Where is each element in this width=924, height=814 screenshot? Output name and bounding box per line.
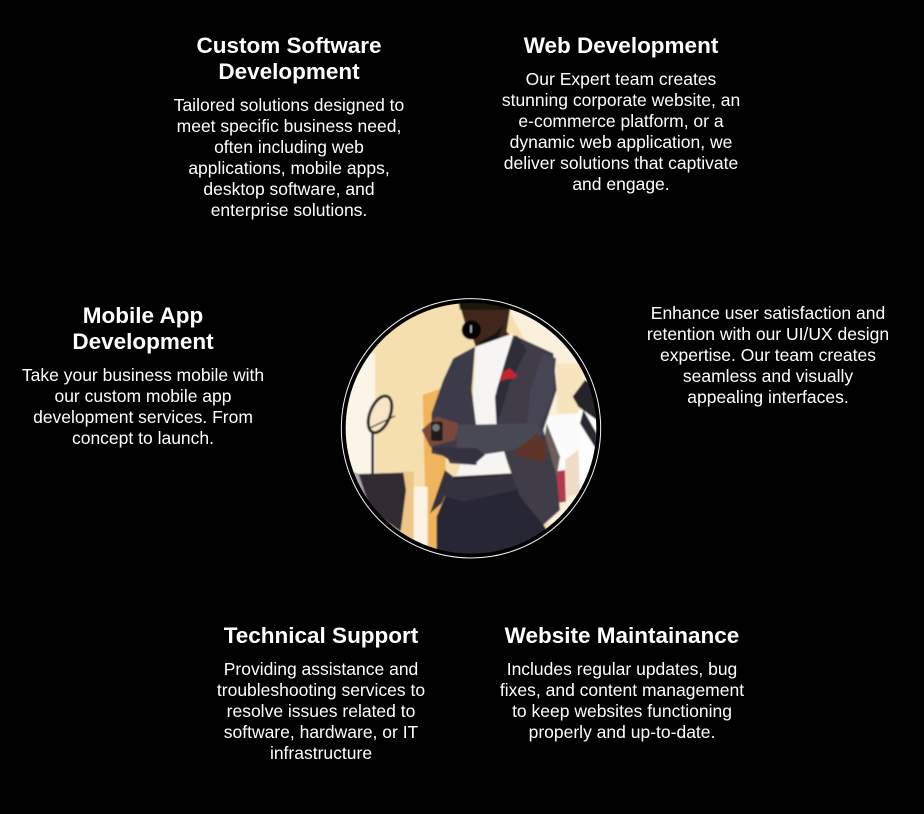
- right objects: [573, 380, 597, 420]
- service: ui/ux design: [647, 303, 889, 407]
- wall: [370, 304, 554, 540]
- service: technical support: [217, 623, 425, 763]
- portrait scene: [346, 303, 596, 554]
- description: mobile app development: [22, 365, 264, 448]
- description: website maintainance: fixes, and content management: [500, 680, 744, 700]
- description: technical support: resolve issues related to: [227, 701, 415, 721]
- description: website maintainance: Includes regular updates, bug: [507, 659, 737, 679]
- description: ui/ux design: seamless and visually: [683, 366, 853, 386]
- description: custom software development: enterprise solutions.: [211, 200, 367, 220]
- description: web development: e-commerce platform, or a: [518, 111, 724, 131]
- service: web development: [502, 33, 740, 194]
- door: [422, 388, 446, 549]
- description: technical support: software, hardware, or IT: [224, 722, 418, 742]
- description: custom software development: meet specific business need,: [177, 116, 401, 136]
- description: custom software development: often including web: [214, 137, 364, 157]
- service: website maintainance: [500, 623, 744, 742]
- heading: mobile app development: Mobile App: [83, 303, 203, 328]
- neck and head: [460, 308, 511, 348]
- description: mobile app development: concept to launch.: [72, 428, 214, 448]
- ring light: [366, 394, 394, 436]
- description: web development: and engage.: [572, 174, 670, 194]
- white outer ring: [341, 299, 601, 558]
- description: technical support: troubleshooting services to: [217, 680, 425, 700]
- description: mobile app development: development services. From: [33, 407, 253, 427]
- description: website maintainance: properly and up-to-date.: [529, 722, 715, 742]
- trousers: [437, 473, 547, 557]
- wristwatch: [431, 422, 443, 441]
- heading: mobile app development: Development: [72, 329, 214, 354]
- description: web development: Our Expert team creates: [526, 69, 716, 89]
- heading: mobile app development: [72, 303, 214, 354]
- chair: [358, 473, 406, 532]
- white shirt: [457, 333, 513, 476]
- heading: custom software development: Development: [218, 59, 360, 84]
- description: ui/ux design: [647, 303, 889, 407]
- description: technical support: infrastructure: [270, 743, 372, 763]
- hands: [422, 417, 458, 447]
- description: ui/ux design: appealing interfaces.: [687, 387, 849, 407]
- circular portrait photo: [340, 298, 602, 558]
- description: ui/ux design: expertise. Our team creates: [660, 345, 876, 365]
- heading: custom software development: Custom Software: [196, 33, 382, 58]
- heading: web development: Web Development: [524, 33, 718, 58]
- pocket square: [500, 368, 517, 382]
- description: technical support: Providing assistance and: [224, 659, 418, 679]
- service: custom software development: [174, 33, 404, 220]
- heading: custom software development: [196, 33, 382, 84]
- description: custom software development: desktop software, and: [203, 179, 375, 199]
- description: web development: dynamic web application, we: [510, 132, 732, 152]
- description: custom software development: [174, 95, 404, 220]
- description: web development: stunning corporate website, an: [502, 90, 740, 110]
- description: ui/ux design: retention with our UI/UX design: [647, 324, 889, 344]
- heading: technical support: Technical Support: [224, 623, 418, 648]
- description: mobile app development: our custom mobile app: [54, 386, 232, 406]
- description: mobile app development: Take your business mobile with: [22, 365, 264, 385]
- jacket left: [432, 347, 477, 465]
- description: custom software development: Tailored solutions designed to: [174, 95, 404, 115]
- service: mobile app development: [22, 303, 264, 448]
- description: custom software development: applications, mobile apps,: [188, 158, 390, 178]
- description: ui/ux design: Enhance user satisfaction and: [651, 303, 885, 323]
- description: web development: deliver solutions that captivate: [504, 153, 738, 173]
- description: website maintainance: [500, 659, 744, 742]
- black watch overlay: [462, 320, 481, 340]
- jacket right: [497, 335, 560, 525]
- folded sleeve: [457, 423, 543, 455]
- heading: website maintainance: Website Maintainance: [505, 623, 739, 648]
- description: website maintainance: to keep websites functioning: [512, 701, 732, 721]
- description: web development: [502, 69, 740, 194]
- description: technical support: [217, 659, 425, 763]
